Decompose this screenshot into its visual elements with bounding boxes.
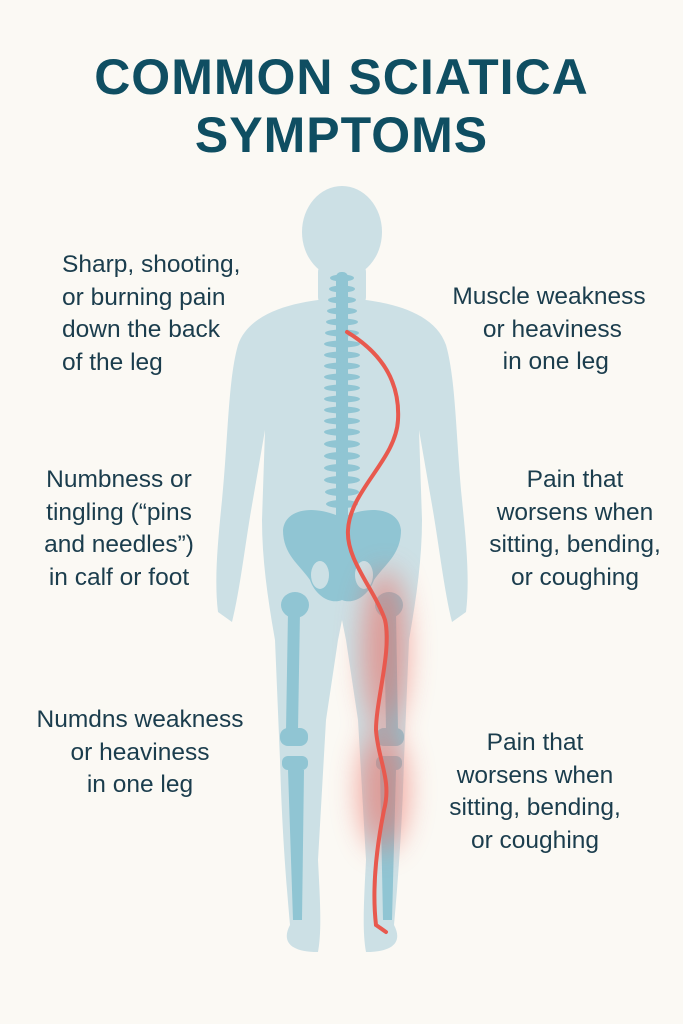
silhouette bbox=[216, 186, 468, 952]
text: left top: or burning pain bbox=[62, 284, 225, 310]
spine bbox=[324, 272, 360, 522]
text: right top: in one leg bbox=[503, 348, 609, 375]
text: left bottom: Numdns weakness bbox=[36, 706, 243, 733]
text: left middle bbox=[44, 466, 194, 590]
text: left top: Sharp, shooting, bbox=[62, 251, 240, 278]
text: right top bbox=[452, 283, 646, 375]
text: left bottom bbox=[36, 706, 243, 798]
text: left bottom: in one leg bbox=[87, 771, 193, 798]
red pain glow bbox=[359, 570, 407, 850]
text: left top bbox=[62, 251, 240, 376]
text: right middle: worsens when bbox=[497, 498, 653, 526]
text: right middle: or coughing bbox=[511, 564, 639, 590]
title bbox=[94, 49, 589, 163]
text: right bottom: worsens when bbox=[457, 762, 613, 788]
pelvis and leg bones bbox=[280, 510, 404, 920]
text: left middle: and needles”) bbox=[44, 531, 194, 558]
text: left middle: tingling (“pins bbox=[46, 498, 192, 526]
title: SYMPTOMS bbox=[195, 107, 488, 163]
text: right bottom: Pain that bbox=[487, 729, 583, 756]
text: right middle: sitting, bending, bbox=[489, 531, 661, 558]
text: right bottom: or coughing bbox=[471, 826, 599, 854]
text: right bottom bbox=[449, 729, 621, 854]
text: right top: or heaviness bbox=[483, 316, 622, 342]
text: left middle: in calf or foot bbox=[49, 564, 189, 590]
text: left top: down the back bbox=[62, 316, 220, 343]
text: left bottom: or heaviness bbox=[71, 738, 209, 766]
text: right middle: Pain that bbox=[527, 466, 623, 493]
text: right bottom: sitting, bending, bbox=[449, 794, 621, 821]
text: right middle bbox=[489, 466, 661, 590]
sciatic nerve bbox=[347, 332, 398, 932]
text: left middle: Numbness or bbox=[46, 466, 192, 493]
text: left top: of the leg bbox=[62, 348, 163, 376]
text: right top: Muscle weakness bbox=[452, 283, 646, 310]
title: COMMON SCIATICA bbox=[94, 49, 589, 105]
